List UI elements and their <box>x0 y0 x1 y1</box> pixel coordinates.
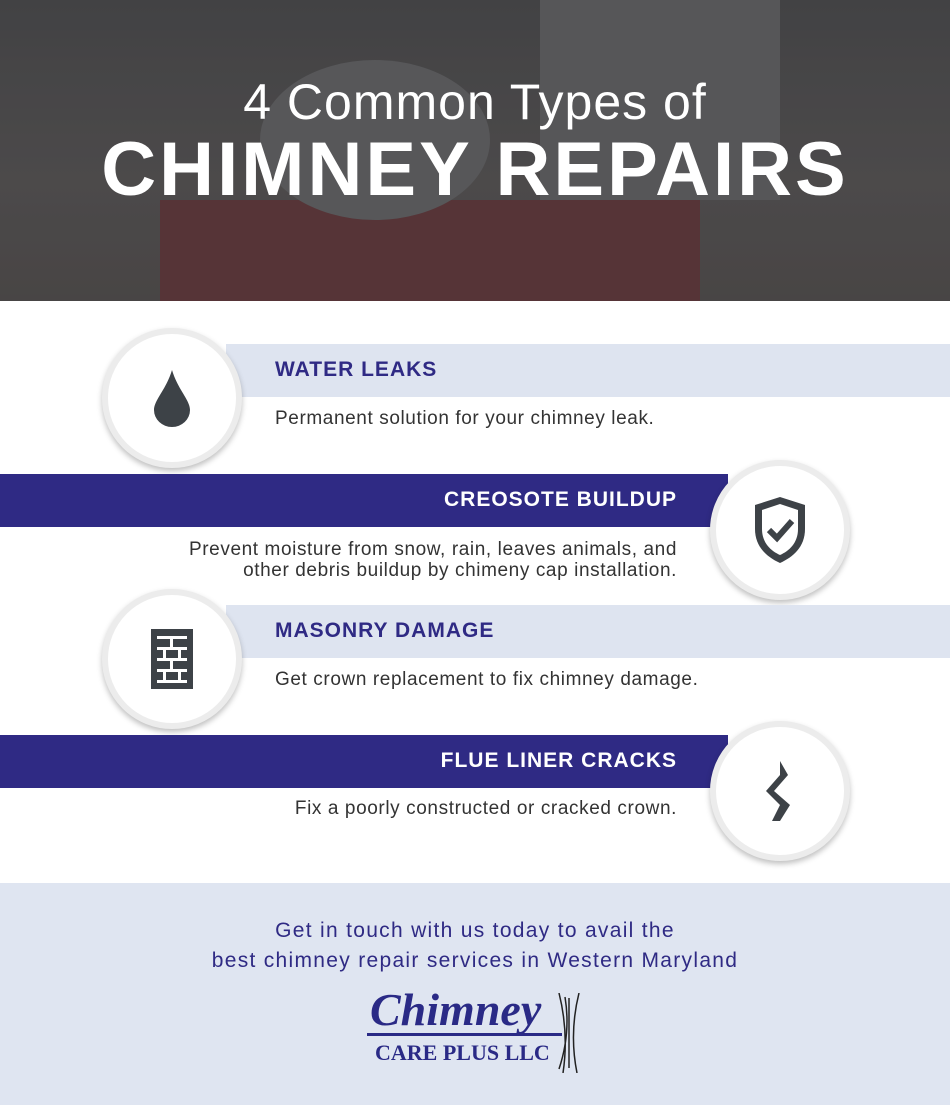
logo: Chimney <box>370 984 541 1035</box>
call to action text: Get in touch with us today to avail the <box>275 919 675 942</box>
row: flue liner cracks <box>0 721 853 867</box>
footer panel <box>0 883 950 1105</box>
call to action text <box>212 919 738 972</box>
row: creosote buildup: other debris buildup by chimeny cap installation. <box>243 560 677 581</box>
row: masonry damage: MASONRY DAMAGE <box>275 619 494 642</box>
icon: crack <box>710 721 850 861</box>
icon: water drop <box>102 328 242 468</box>
row: creosote buildup <box>0 460 853 605</box>
logo <box>367 984 580 1073</box>
row: water leaks: WATER LEAKS <box>275 358 437 381</box>
row: masonry damage: Get crown replacement to fix chimney damage. <box>275 669 698 690</box>
call to action text: best chimney repair services in Western Maryland <box>212 949 738 972</box>
logo: CARE PLUS LLC <box>375 1040 550 1065</box>
row: creosote buildup: CREOSOTE BUILDUP <box>444 488 677 511</box>
row: flue liner cracks: FLUE LINER CRACKS <box>441 749 677 772</box>
row: masonry damage <box>99 589 950 735</box>
title <box>101 74 849 212</box>
title: CHIMNEY REPAIRS <box>101 127 849 212</box>
row: water leaks <box>99 328 950 474</box>
row: flue liner cracks: Fix a poorly constructed or cracked crown. <box>295 798 677 819</box>
row: creosote buildup: Prevent moisture from snow, rain, leaves animals, and <box>189 539 677 560</box>
title: 4 Common Types of <box>243 74 707 130</box>
row: water leaks: Permanent solution for your chimney leak. <box>275 408 654 429</box>
header photo background <box>0 0 950 301</box>
icon: shield <box>710 460 850 600</box>
icon: chimney bricks <box>102 589 242 729</box>
